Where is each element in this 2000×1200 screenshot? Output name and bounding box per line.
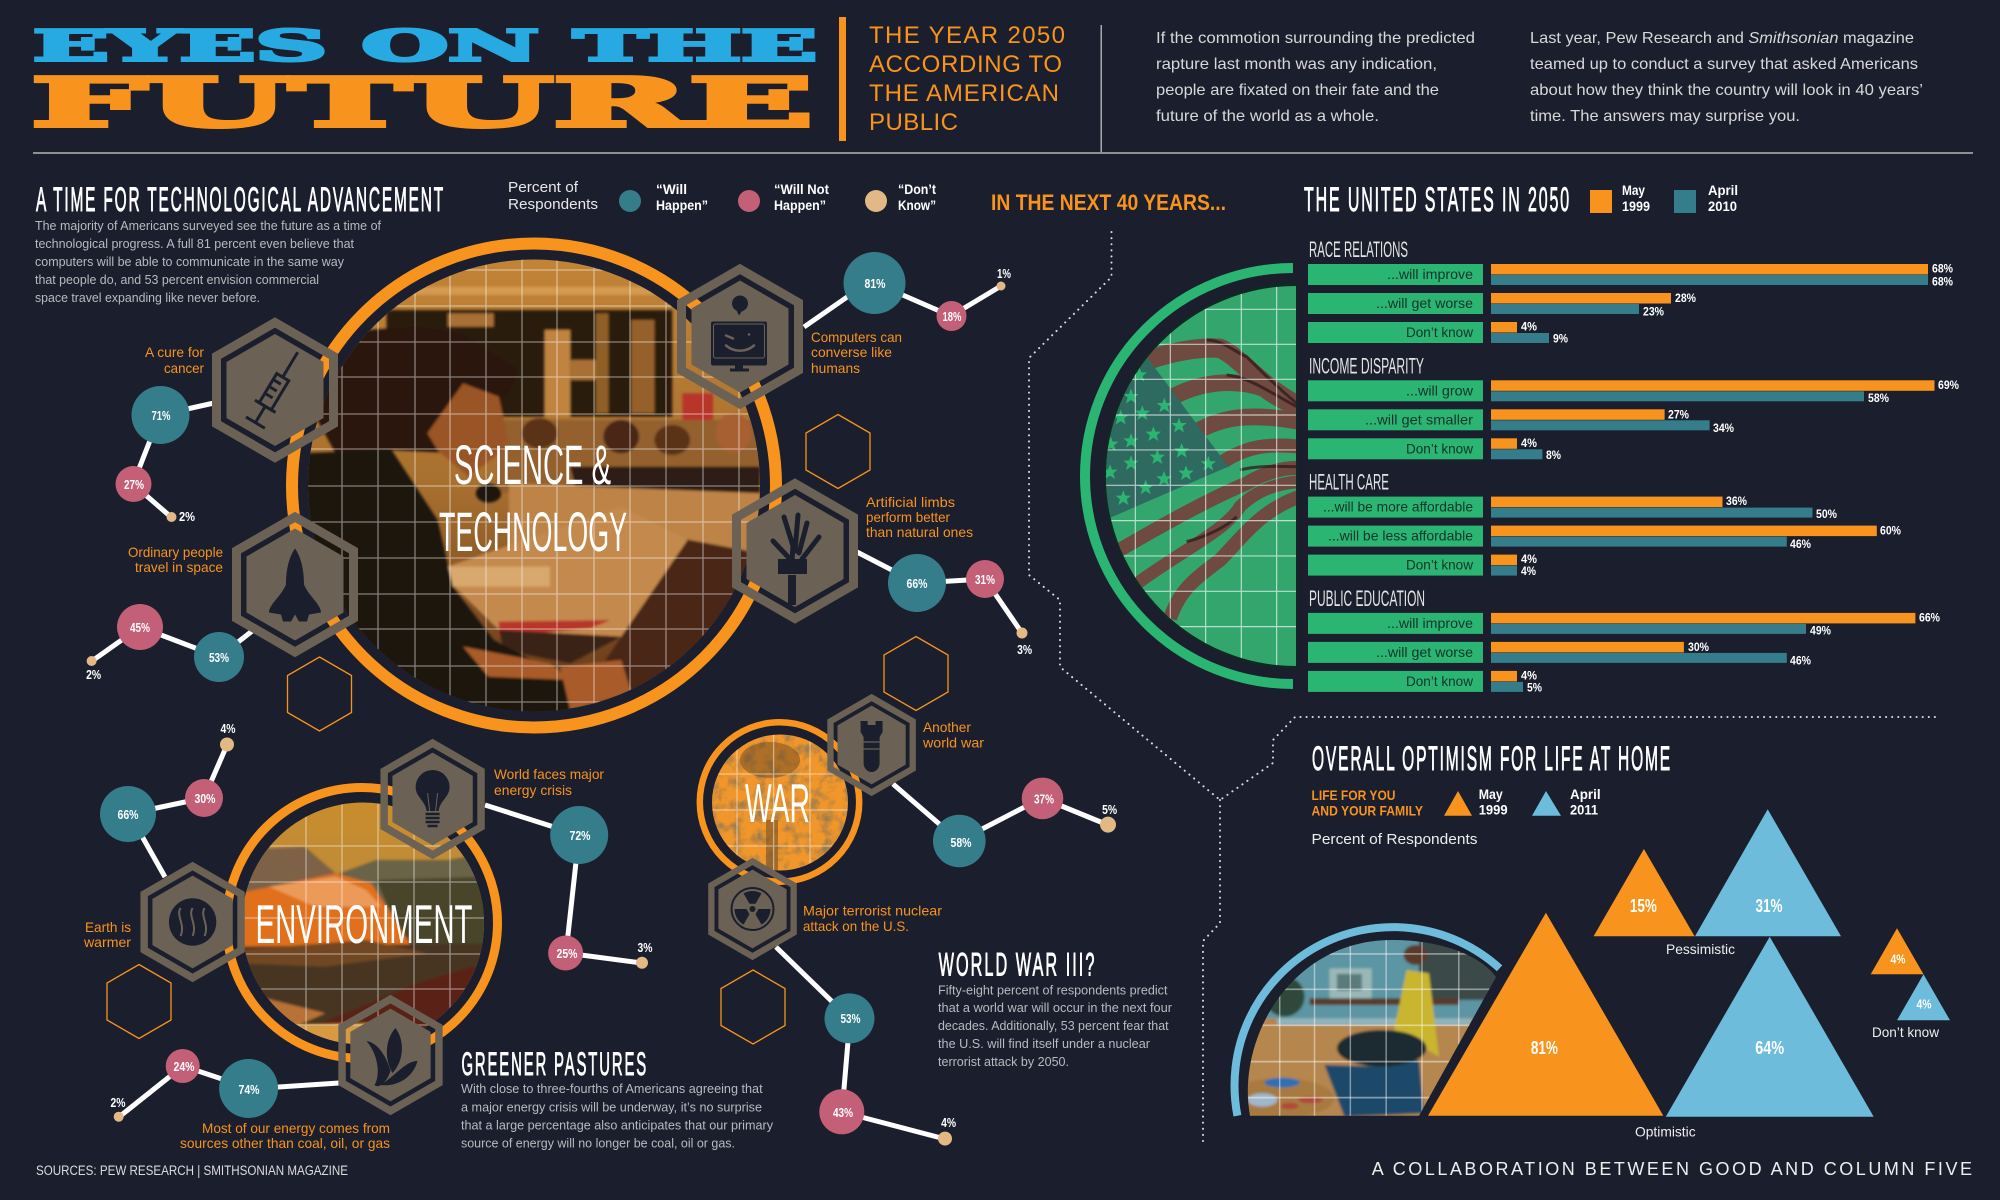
panel: overall optimism <box>1220 740 1950 1140</box>
photo label <box>439 433 627 563</box>
chart group: race relations: ...will improve <box>1387 266 1473 282</box>
chart: energy crisis: 72% <box>570 828 591 843</box>
intro paragraph 2: time. The answers may surprise you. <box>1530 108 1800 125</box>
chart group: income disparity: 34% <box>1713 421 1734 435</box>
legend: percent of respondents <box>508 179 936 213</box>
chart: computers converse: Computers can <box>811 329 902 345</box>
text block: greener pastures: With close to three-fourths of Americans agreeing that <box>461 1081 763 1096</box>
intro paragraph 1: people are fixated on their fate and the <box>1156 82 1439 99</box>
grid overlay <box>300 250 770 720</box>
chart group: race relations: 9% <box>1553 332 1568 346</box>
chart: computers converse: 1% <box>997 266 1011 281</box>
chart: artificial limbs <box>855 494 1032 657</box>
chart: artificial limbs: 31% <box>975 572 995 587</box>
chart group: health care: 50% <box>1816 507 1837 521</box>
chart: computers converse: 18% <box>942 309 962 324</box>
chart: terrorist attack: Major terrorist nuclear <box>803 903 942 919</box>
chart: artificial limbs: Artificial limbs <box>866 494 955 510</box>
chart: cure for cancer: 27% <box>124 477 144 492</box>
chart: computers converse: converse like <box>811 344 892 360</box>
chart: cure for cancer: 71% <box>152 408 171 423</box>
panel: environment <box>83 721 653 1151</box>
heading: technological advancement <box>35 181 445 305</box>
outline hexagons <box>721 636 948 1044</box>
chart group: health care: 46% <box>1790 537 1811 551</box>
text block: world war iii: terrorist attack by 2050. <box>938 1054 1069 1069</box>
panel: united states in 2050 <box>1085 181 1959 694</box>
triangles: don't know <box>1871 928 1950 1040</box>
ring <box>226 788 498 1058</box>
chart group: income disparity: 27% <box>1668 407 1689 421</box>
legend: April <box>1570 786 1601 802</box>
legend: 1999 <box>1479 802 1508 818</box>
chart: earth warmer: warmer <box>83 934 131 950</box>
chart group: race relations: ...will get worse <box>1376 295 1473 311</box>
chart: artificial limbs: 3% <box>1017 642 1032 657</box>
photo label: ENVIRONMENT <box>256 893 472 955</box>
intro paragraph 1: future of the world as a whole. <box>1156 108 1379 125</box>
chart: energy crisis: World faces major <box>494 766 604 782</box>
chart group: public education <box>1308 586 1940 694</box>
chart group: health care <box>1308 470 1901 578</box>
icon: radiation <box>711 862 794 956</box>
heading: in the next 40 years: IN THE NEXT 40 YEARS... <box>991 190 1226 215</box>
subtitle: PUBLIC <box>869 109 958 136</box>
chart: alternative energy: 24% <box>174 1059 195 1074</box>
chart: alternative energy: sources other than coal, oil, or gas <box>180 1135 390 1151</box>
chart group: income disparity: 58% <box>1868 391 1889 405</box>
text block: greener pastures: a major energy crisis will be underway, it’s no surprise <box>461 1100 762 1115</box>
chart group: income disparity: 69% <box>1938 378 1959 392</box>
chart: world war: Another <box>923 719 971 735</box>
chart group: health care: ...will be more affordable <box>1323 499 1473 515</box>
legend: May <box>1622 182 1645 198</box>
chart: computers converse <box>804 252 1011 376</box>
chart: space travel: 45% <box>130 620 150 635</box>
chart: earth warmer: 66% <box>118 807 139 822</box>
icon: corn <box>342 999 439 1111</box>
chart group: health care: HEALTH CARE <box>1309 470 1389 495</box>
chart group: public education: Don’t know <box>1406 673 1474 689</box>
text block: greener pastures: source of energy will no longer be coal, oil or gas. <box>461 1136 735 1151</box>
photo: mountains <box>244 802 484 1044</box>
legend: 2010 <box>1708 198 1737 214</box>
triangles: optimistic: 81% <box>1531 1038 1558 1058</box>
chart: earth warmer <box>83 721 236 950</box>
legend: 2011 <box>1570 802 1598 818</box>
chart: terrorist attack <box>776 903 956 1146</box>
legend: percent of respondents: Respondents <box>508 196 598 213</box>
panel: science and technology: TECHNOLOGY <box>439 500 627 563</box>
chart: world war: 5% <box>1102 802 1117 817</box>
chart: earth warmer: Earth is <box>85 919 131 935</box>
chart: world war: world war <box>922 734 984 750</box>
chart group: race relations: 28% <box>1675 291 1696 305</box>
text block: world war iii: Fifty-eight percent of respondents predict <box>938 982 1168 997</box>
text block: greener pastures: GREENER PASTURES <box>462 1046 648 1082</box>
intro paragraph 2: about how they think the country will look in 40 years’ <box>1530 82 1923 99</box>
chart group: race relations: Don’t know <box>1406 324 1474 340</box>
legend: AND YOUR FAMILY <box>1312 803 1424 819</box>
intro paragraph 2 <box>1530 30 1923 125</box>
triangles: pessimistic <box>1594 809 1841 957</box>
triangles: pessimistic: Pessimistic <box>1666 941 1735 957</box>
title: EYES ON THE <box>33 22 817 72</box>
legend: percent of respondents: Happen” <box>774 198 826 213</box>
triangles: don't know: 4% <box>1890 952 1906 966</box>
grid overlay <box>244 804 484 1030</box>
legend <box>1590 182 1738 214</box>
chart: alternative energy: Most of our energy comes from <box>202 1120 390 1136</box>
footer: sources: SOURCES: PEW RESEARCH | SMITHSONIAN MAGAZINE <box>36 1163 348 1178</box>
chart: earth warmer: 4% <box>220 721 236 736</box>
chart group: income disparity: 8% <box>1546 448 1561 462</box>
chart group: health care: 60% <box>1880 524 1901 538</box>
text block: greener pastures <box>461 1046 773 1151</box>
chart group: public education: 30% <box>1688 640 1709 654</box>
icon: space shuttle <box>236 517 354 652</box>
header <box>31 17 1973 154</box>
chart group: public education: 5% <box>1527 680 1542 694</box>
icon: light bulb <box>384 743 481 855</box>
intro paragraph 1 <box>1156 30 1475 125</box>
footer: collaboration credit: A COLLABORATION BETWEEN GOOD AND COLUMN FIVE <box>1372 1159 1972 1179</box>
legend: percent of respondents: Happen” <box>656 198 708 213</box>
triangles: don't know: Don’t know <box>1872 1024 1940 1040</box>
chart: artificial limbs: than natural ones <box>866 524 973 540</box>
chart group: income disparity: ...will grow <box>1406 382 1474 398</box>
text: A TIME FOR TECHNOLOGICAL ADVANCEMENT <box>36 181 445 219</box>
intro text: technology <box>35 218 381 305</box>
panel: war <box>700 636 1117 1146</box>
chart: space travel: travel in space <box>135 559 223 575</box>
text block: world war iii: WORLD WAR III? <box>939 947 1096 983</box>
panel: united states in 2050: THE UNITED STATES IN 2050 <box>1304 181 1571 219</box>
legend: percent of respondents: Know” <box>898 198 936 213</box>
intro text: technology: that people do, and 53 percent envision commercial <box>35 272 319 287</box>
intro paragraph 1: If the commotion surrounding the predicted <box>1156 30 1475 47</box>
legend: 1999 <box>1622 198 1650 214</box>
chart: cure for cancer: 2% <box>179 509 195 524</box>
icon: artificial arm <box>736 484 854 618</box>
chart: space travel: 2% <box>86 667 101 682</box>
chart group: race relations: RACE RELATIONS <box>1309 237 1408 262</box>
chart: alternative energy: 2% <box>110 1095 126 1110</box>
chart: world war <box>893 719 1117 867</box>
chart group: race relations: 23% <box>1643 304 1664 318</box>
chart: space travel <box>86 544 256 682</box>
chart group: health care: ...will be less affordable <box>1328 528 1473 544</box>
chart: computers converse: humans <box>811 360 860 376</box>
triangles: pessimistic: 31% <box>1756 896 1782 916</box>
chart group: public education: PUBLIC EDUCATION <box>1309 586 1425 611</box>
chart group: public education: 4% <box>1521 668 1537 682</box>
chart: terrorist attack: 53% <box>840 1011 861 1026</box>
photo: mushroom cloud <box>712 734 848 870</box>
ring <box>292 244 776 728</box>
chart: energy crisis: 3% <box>638 940 653 955</box>
chart group: health care: 4% <box>1521 564 1536 578</box>
chart group: race relations <box>1308 237 1953 346</box>
chart group: public education: ...will improve <box>1387 615 1473 631</box>
text block: world war iii <box>938 947 1173 1069</box>
text block: world war iii: that a world war will occur in the next four <box>938 1000 1173 1015</box>
chart group: income disparity: 4% <box>1521 436 1537 450</box>
intro text: technology: space travel expanding like never before. <box>35 290 260 305</box>
legend: May <box>1479 786 1503 802</box>
intro paragraph 2: Last year, Pew Research and Smithsonian magazine <box>1530 30 1914 47</box>
ring <box>700 722 859 882</box>
legend: Percent of Respondents <box>1312 831 1478 848</box>
photo label: WAR <box>745 772 810 834</box>
chart: cure for cancer: A cure for <box>145 344 204 360</box>
legend: percent of respondents: “Don’t <box>898 182 936 197</box>
subtitle <box>869 22 1065 136</box>
chart group: income disparity <box>1308 353 1959 462</box>
icon: syringe <box>216 322 334 458</box>
icon: heat waves <box>144 866 241 978</box>
triangles: optimistic: Optimistic <box>1635 1124 1696 1140</box>
chart group: public education: ...will get worse <box>1376 644 1473 660</box>
intro text: technology: The majority of Americans surveyed see the future as a time of <box>35 218 381 233</box>
legend: percent of respondents: Percent of <box>508 179 579 196</box>
triangles: optimistic: 64% <box>1755 1038 1784 1058</box>
photo: switchboard operator <box>300 250 770 720</box>
chart: terrorist attack: 4% <box>941 1115 956 1130</box>
chart group: health care: 4% <box>1521 552 1537 566</box>
chart: energy crisis: 25% <box>556 946 578 961</box>
text block: greener pastures: that a large percentage also anticipates that our primary <box>461 1118 773 1133</box>
chart: terrorist attack: 43% <box>833 1105 853 1120</box>
legend: percent of respondents: “Will <box>656 182 687 197</box>
chart: cure for cancer: cancer <box>164 360 204 376</box>
photo label: SCIENCE & <box>454 433 611 496</box>
panel: science and technology <box>86 244 1032 731</box>
title <box>31 22 817 142</box>
chart group: public education: 49% <box>1810 623 1831 637</box>
icon: bomb <box>830 698 913 792</box>
title: FUTURE <box>31 63 813 142</box>
photo: living room <box>1230 923 1502 1116</box>
legend: LIFE FOR YOU <box>1312 787 1396 803</box>
outline hexagons <box>288 414 870 731</box>
text block: world war iii: decades. Additionally, 53 percent fear that <box>938 1018 1169 1033</box>
chart: computers converse: 81% <box>864 276 886 291</box>
legend <box>1312 786 1601 848</box>
chart: energy crisis <box>485 766 653 970</box>
chart: alternative energy <box>110 1049 390 1151</box>
grid overlay <box>712 734 848 870</box>
chart group: public education: 46% <box>1790 653 1811 667</box>
chart group: race relations: 68% <box>1932 274 1953 288</box>
legend: April <box>1708 182 1738 198</box>
chart group: income disparity: Don’t know <box>1406 440 1474 456</box>
chart: cure for cancer <box>116 344 214 524</box>
chart group: income disparity: INCOME DISPARITY <box>1309 353 1424 378</box>
chart group: public education: 66% <box>1919 610 1940 624</box>
text block: world war iii: the U.S. will find itself under a nuclear <box>938 1036 1151 1051</box>
chart: world war: 58% <box>950 835 972 850</box>
chart group: health care: 36% <box>1726 494 1747 508</box>
chart group: income disparity: ...will get smaller <box>1365 411 1473 427</box>
chart group: health care: Don’t know <box>1406 557 1474 573</box>
dotted connector lines <box>1029 232 1936 1141</box>
chart group: race relations: 68% <box>1932 262 1953 276</box>
chart: space travel: Ordinary people <box>128 544 223 560</box>
icon: computer <box>682 269 798 404</box>
triangles: pessimistic: 15% <box>1630 896 1657 916</box>
chart: space travel: 53% <box>209 650 229 665</box>
chart: world war: 37% <box>1034 792 1054 806</box>
chart: artificial limbs: perform better <box>866 509 950 525</box>
chart: terrorist attack: attack on the U.S. <box>803 918 909 934</box>
triangles: don't know: 4% <box>1916 996 1932 1012</box>
intro paragraph 1: rapture last month was any indication, <box>1156 56 1437 73</box>
chart: energy crisis: energy crisis <box>494 782 572 798</box>
intro paragraph 2: teamed up to conduct a survey that asked Americans <box>1530 56 1918 73</box>
triangles: optimistic <box>1428 913 1874 1140</box>
subtitle: THE YEAR 2050 <box>869 22 1065 49</box>
chart: alternative energy: 74% <box>238 1082 260 1097</box>
flag photo <box>1085 268 1300 684</box>
subtitle: THE AMERICAN <box>869 80 1059 107</box>
intro text: technology: technological progress. A full 81 percent even believe that <box>35 236 354 251</box>
intro text: technology: computers will be able to communicate in the same way <box>35 254 344 269</box>
outline hexagon <box>107 964 171 1038</box>
chart: artificial limbs: 66% <box>906 576 928 591</box>
chart group: race relations: 4% <box>1521 320 1537 334</box>
chart: earth warmer: 30% <box>194 791 216 806</box>
legend: percent of respondents: “Will Not <box>774 182 829 197</box>
subtitle: ACCORDING TO <box>869 51 1062 78</box>
